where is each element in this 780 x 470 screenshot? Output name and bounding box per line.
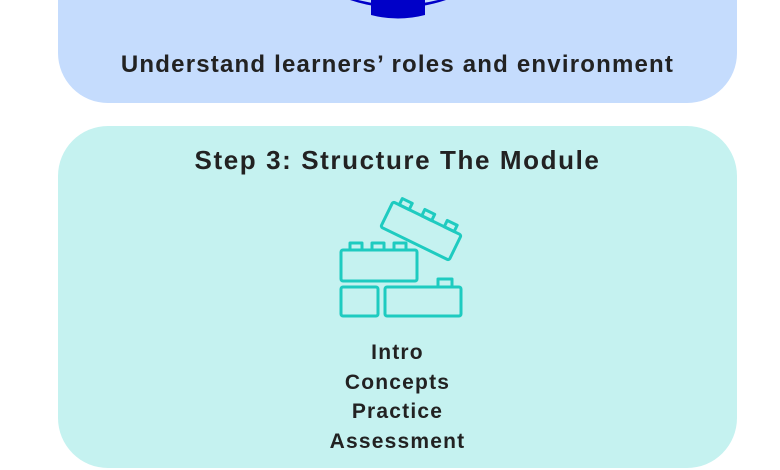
- heading: step 3: Step 3: Structure The Module: [195, 145, 600, 175]
- panel: step 2: [58, 0, 737, 103]
- text: module parts: Assessment: [330, 430, 465, 452]
- icon: building blocks: [340, 197, 462, 318]
- text: module parts: Practice: [352, 400, 443, 423]
- text: step 2 caption: Understand learners’ roles and environment: [121, 51, 674, 78]
- text: module parts: Concepts: [345, 370, 450, 394]
- text: module parts: [330, 341, 465, 452]
- text: module parts: Intro: [371, 341, 424, 364]
- icon: person (partial): [350, 0, 446, 18]
- panel: step 3: [58, 126, 737, 468]
